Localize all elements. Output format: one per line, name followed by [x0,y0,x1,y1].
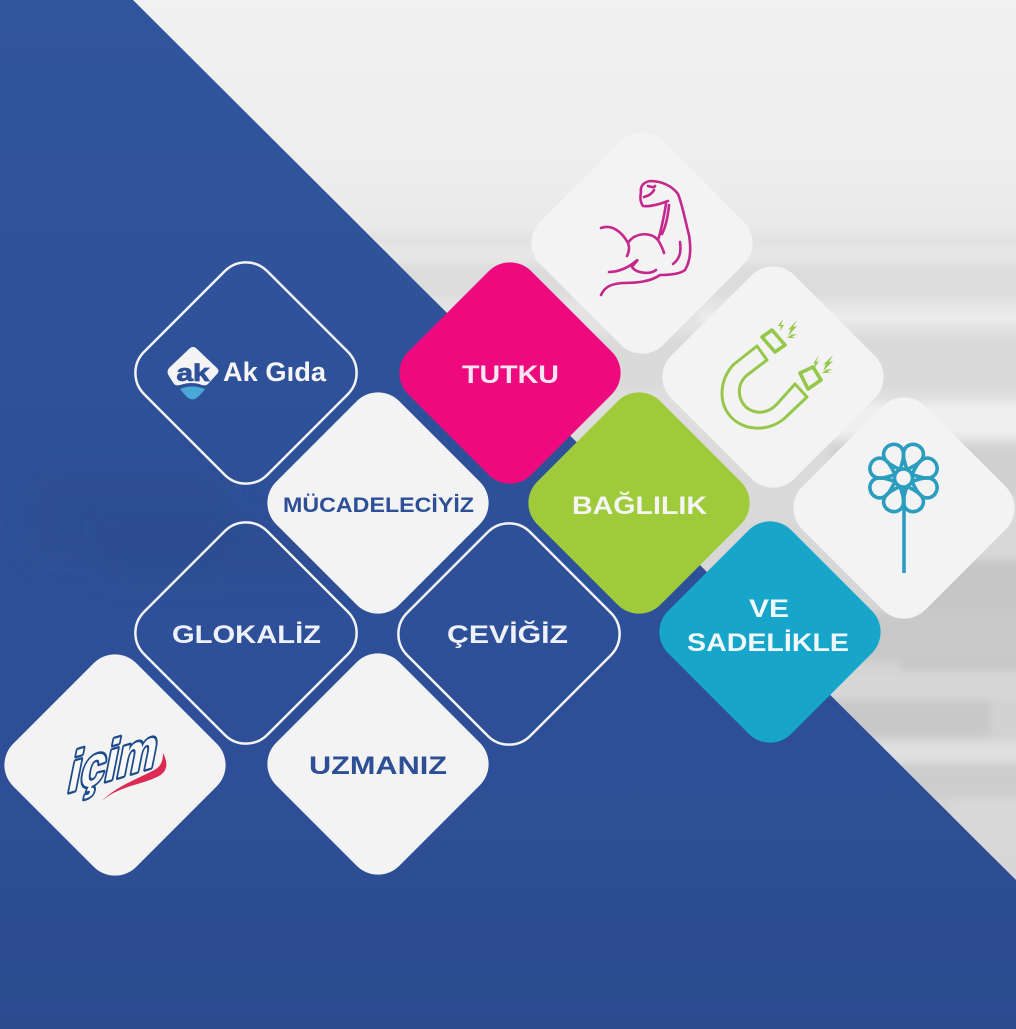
panel: UZMANIZ diamond [255,641,501,887]
background: grey aerial photo triangle [133,0,1016,880]
panel: İçim logo diamond [0,642,238,888]
panel: ÇEVİĞİZ outline diamond: ÇEVİĞİZ [447,620,568,649]
panel: Ak Gıda logo outline diamond [123,250,369,496]
panel: TUTKU diamond [387,250,633,496]
icon: Ak Gıda logo mark: ak [176,360,210,387]
panel: GLOKALİZ outline diamond: GLOKALİZ [172,621,321,649]
panel: muscle icon diamond [519,120,765,366]
panel: ÇEVİĞİZ outline diamond [386,511,632,757]
panel: MÜCADELECİYİZ diamond [255,380,501,626]
icon: red swoosh [102,753,166,801]
text: İçim logo: içim [63,714,164,806]
panel: TUTKU diamond: TUTKU [462,361,559,389]
panel: VE SADELİKLE diamond [647,509,893,755]
icon: magnet sparks [778,319,833,373]
panel: VE SADELİKLE diamond: SADELİKLE [687,629,849,657]
background: faint factory silhouette in blue [30,470,380,580]
icon: horseshoe magnet [722,330,821,428]
panel: MÜCADELECİYİZ diamond: MÜCADELECİYİZ [283,494,474,517]
panel: BAĞLILIK diamond: BAĞLILIK [572,491,707,520]
icon: flexed arm [601,181,690,295]
icon: Ak Gıda logo mark [168,347,218,399]
panel: VE SADELİKLE diamond: VE [749,595,789,623]
panel: GLOKALİZ outline diamond [123,510,369,756]
icon: flower [867,441,940,573]
panel: BAĞLILIK diamond [516,380,762,626]
panel: magnet icon diamond [650,254,896,500]
panel: UZMANIZ diamond: UZMANIZ [309,752,447,780]
text: Ak Gıda: Ak Gıda [223,357,327,387]
panel: flower icon diamond [781,385,1016,631]
